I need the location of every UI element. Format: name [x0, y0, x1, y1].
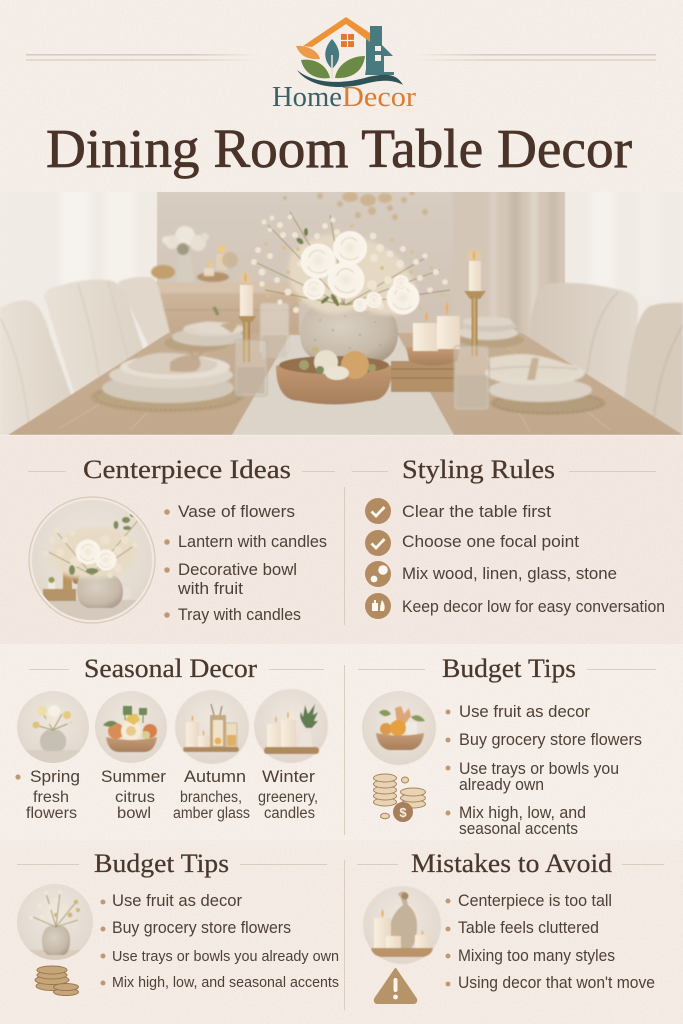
heading: Seasonal Decor	[84, 654, 257, 683]
heading: Budget Tips	[442, 654, 576, 683]
list: Buy grocery store flowers	[459, 731, 642, 749]
panel: styling rules	[352, 455, 665, 619]
summer column: bowl	[117, 805, 151, 822]
panel: centerpiece ideas	[28, 455, 335, 624]
header double rule lines	[26, 54, 656, 61]
heading: Centerpiece Ideas	[83, 455, 291, 484]
tall candlestick and glass	[464, 249, 486, 356]
background bouquet and candles	[151, 226, 238, 282]
icon: coins	[374, 774, 426, 822]
rule text: Clear the table first	[402, 503, 552, 521]
winter label: Winter	[262, 767, 315, 786]
room background	[62, 192, 614, 338]
icon: house with leaves	[296, 17, 403, 87]
list: Lantern with candles	[178, 533, 327, 551]
right place settings	[458, 317, 606, 415]
summer citrus bowl illustration	[95, 691, 167, 763]
panel: budget tips left	[17, 849, 339, 996]
vase	[300, 308, 398, 362]
dining chairs	[0, 277, 683, 435]
logo wordmark	[272, 82, 417, 113]
list: already own	[459, 776, 544, 794]
list: Use trays or bowls you	[459, 760, 619, 778]
list: Using decor that won't move	[458, 974, 655, 992]
list: Buy grocery store flowers	[112, 919, 291, 937]
winter detail: greenery,	[258, 789, 318, 806]
autumn column	[173, 690, 250, 822]
back glass	[260, 303, 289, 358]
summer column	[95, 691, 167, 822]
icon: check	[365, 530, 391, 556]
rule text: Choose one focal point	[402, 533, 580, 551]
icon: materials	[365, 561, 391, 587]
candle on brass holder	[238, 272, 256, 362]
heading: Budget Tips	[94, 849, 229, 878]
spring label: Spring	[30, 767, 80, 786]
panel: seasonal decor	[15, 654, 328, 822]
list: Decorative bowl	[178, 561, 297, 579]
list: Mixing too many styles	[458, 947, 615, 965]
logo wordmark: Decor	[342, 82, 417, 113]
heading: Styling Rules	[402, 455, 555, 484]
vase illustration	[17, 884, 93, 962]
list: Tray with candles	[178, 606, 301, 624]
water glasses	[235, 340, 489, 410]
icon: coin stacks	[35, 966, 78, 996]
icon: low decor	[365, 593, 391, 619]
panel: budget tips right	[358, 654, 656, 838]
list: Centerpiece is too tall	[458, 892, 612, 910]
sideboard	[156, 282, 300, 334]
heading: Mistakes to Avoid	[411, 849, 612, 878]
centerpiece illustration circle	[29, 497, 155, 624]
list	[446, 703, 642, 838]
logo: HomeDecor	[272, 17, 417, 113]
winter column: candles	[264, 805, 315, 822]
spring detail: fresh	[33, 789, 69, 806]
list: Vase of flowers	[178, 503, 295, 521]
right candles and wood block	[391, 301, 460, 392]
title: Dining Room Table Decor	[46, 118, 632, 179]
list: Use fruit as decor	[459, 703, 591, 721]
spring vase illustration	[17, 691, 89, 764]
icon: warning triangle	[375, 969, 416, 1003]
table runner	[232, 335, 454, 435]
list: seasonal accents	[459, 820, 578, 838]
list: Use fruit as decor	[112, 892, 243, 910]
list: Table feels cluttered	[458, 919, 599, 937]
table top	[8, 333, 683, 435]
icon: coins: $	[399, 805, 407, 820]
list: Mix high, low, and	[459, 804, 586, 822]
floral arrangement	[251, 212, 450, 315]
list	[100, 892, 339, 991]
fruit bowl	[276, 346, 392, 404]
winter column	[254, 689, 328, 822]
chandelier	[283, 190, 428, 220]
autumn lantern illustration	[175, 690, 249, 764]
autumn label: Autumn	[184, 767, 246, 786]
summer detail: citrus	[115, 789, 155, 806]
rule text: Keep decor low for easy conversation	[402, 598, 665, 616]
list: with fruit	[177, 580, 244, 598]
list: Use trays or bowls you already own	[112, 949, 339, 965]
icon: check	[365, 498, 391, 524]
logo wordmark: Home	[272, 82, 342, 113]
summer label: Summer	[101, 767, 166, 786]
autumn detail: branches,	[180, 789, 242, 806]
list	[446, 892, 655, 992]
list	[164, 503, 327, 624]
left place settings	[90, 307, 245, 413]
hero photo: dining table scene	[0, 188, 683, 438]
panel: mistakes to avoid	[357, 849, 664, 1003]
candles and vase illustration	[363, 886, 441, 964]
spring column: flowers	[26, 805, 77, 822]
winter candles illustration	[254, 689, 328, 763]
fruit bowl illustration	[362, 691, 436, 765]
autumn column: amber glass	[173, 805, 250, 822]
list: Mix high, low, and seasonal accents	[112, 975, 339, 991]
spring column	[15, 691, 89, 822]
rule text: Mix wood, linen, glass, stone	[402, 565, 617, 583]
